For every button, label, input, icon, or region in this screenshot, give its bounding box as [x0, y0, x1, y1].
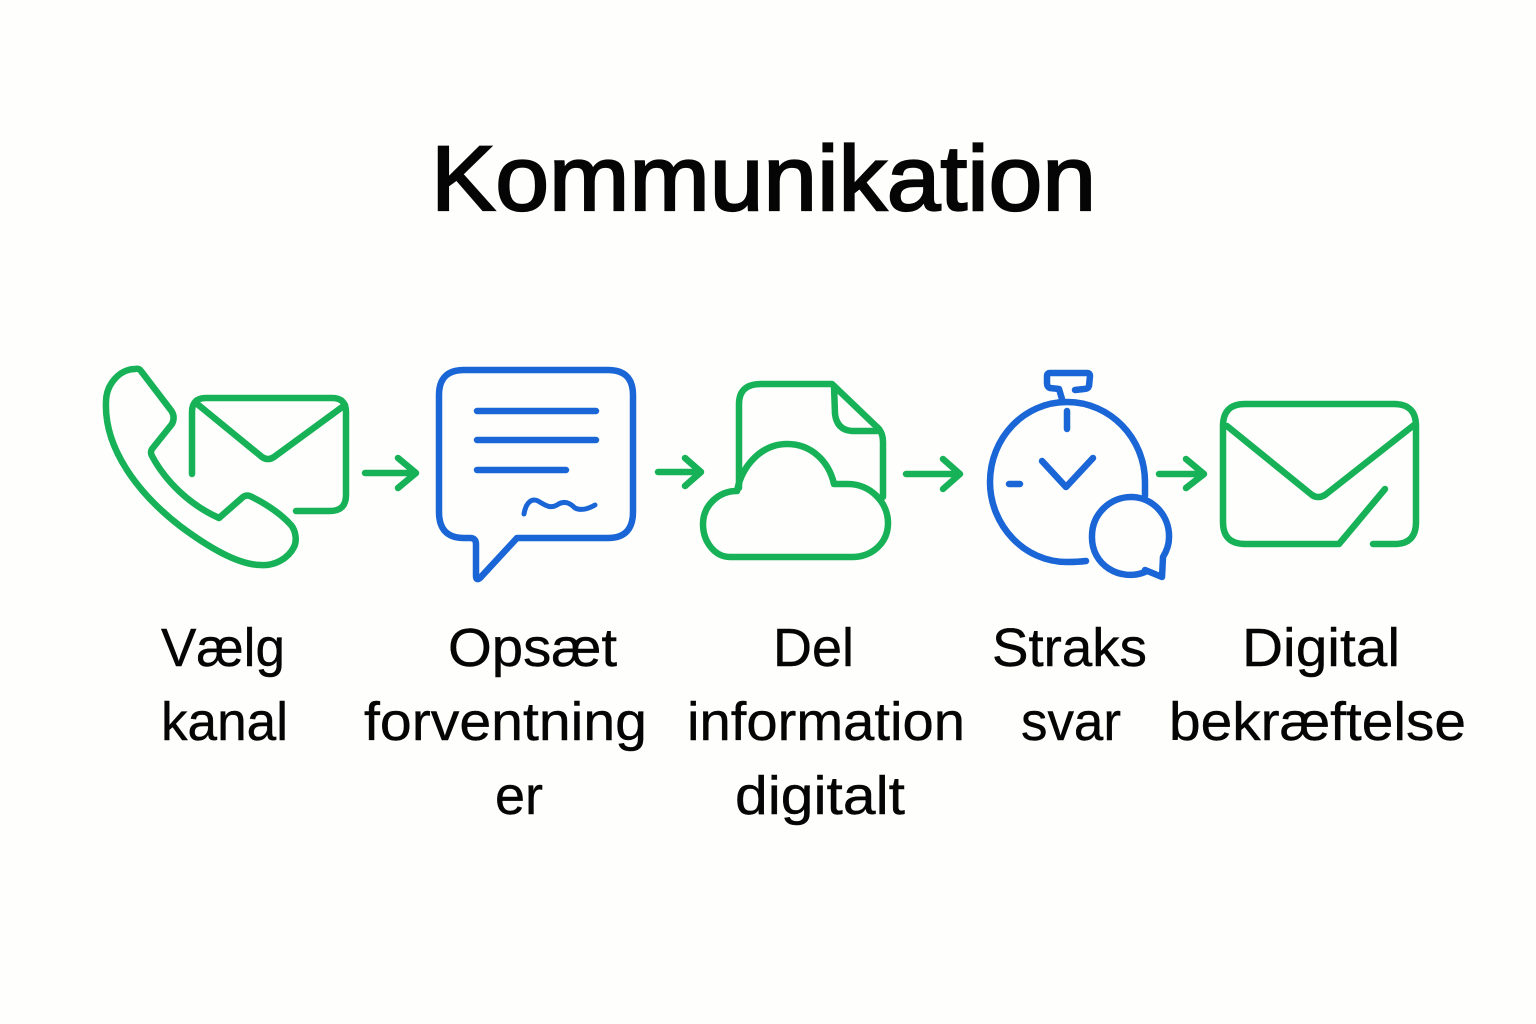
arrow: step 3 to 4: [906, 459, 960, 489]
icon: speech bubble with document lines: [439, 370, 633, 579]
icon: stopwatch with chat bubble: [990, 373, 1169, 577]
label: Digital bekræftelse: bekræftelse: [1169, 692, 1466, 752]
label: Del information digitalt: information: [687, 692, 965, 752]
label: Opsæt forventninger: [364, 618, 647, 826]
arrow: step 4 to 5: [1159, 459, 1204, 488]
label: Vælg kanal: kanal: [161, 692, 288, 752]
label: Digital bekræftelse: Digital: [1242, 618, 1400, 678]
icon: cloud and document: [703, 384, 888, 557]
label: Straks svar: svar: [1021, 692, 1121, 752]
arrow: step 2 to 3: [658, 458, 701, 486]
label: Straks svar: Straks: [992, 618, 1147, 678]
label: Opsæt forventninger: Opsæt: [448, 618, 617, 678]
label: Opsæt forventninger: er: [495, 766, 543, 826]
label: Digital bekræftelse: [1169, 618, 1466, 752]
label: Del information digitalt: digitalt: [735, 766, 905, 826]
arrow: step 1 to 2: [365, 458, 416, 488]
icon: envelope with check: [1223, 404, 1416, 544]
label: Del information digitalt: [687, 618, 965, 826]
label: Vælg kanal: Vælg: [161, 618, 285, 678]
title: Kommunikation: [431, 128, 1096, 230]
label: Vælg kanal: [161, 618, 288, 752]
icon: phone and envelope: [106, 369, 346, 565]
label: Straks svar: [992, 618, 1147, 752]
label: Opsæt forventninger: forventning: [364, 692, 647, 752]
label: Del information digitalt: Del: [773, 618, 854, 678]
